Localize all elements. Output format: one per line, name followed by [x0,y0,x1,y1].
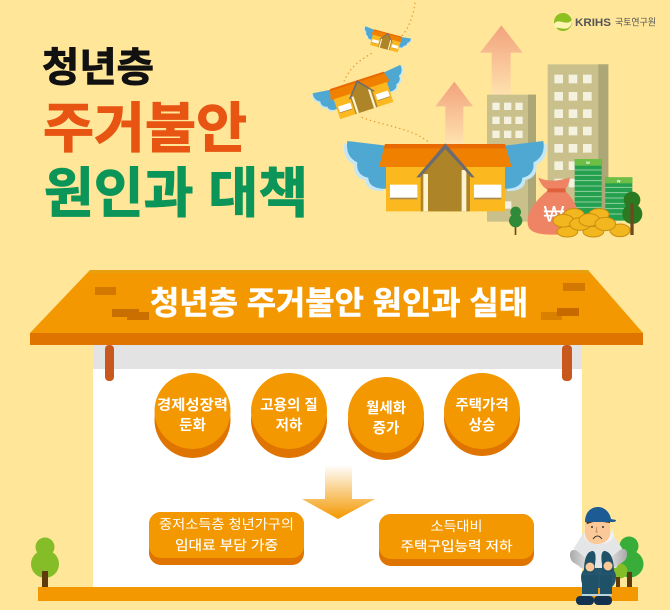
title line: green: 원인과 대책 [44,164,308,224]
roof heading: 청년층 주거불안 원인과 실태 [150,285,528,321]
money bag [528,177,579,235]
sleeve left [570,550,592,571]
house: large flying [344,141,547,211]
cause 1: 둔화 [179,417,206,434]
worried young man [570,507,627,605]
knees [584,551,596,574]
cause 4: 주택가격 [455,397,509,414]
calf left [582,575,598,595]
roof shadow band [93,345,582,369]
money bag: ₩ [544,201,565,226]
gold coins [553,209,630,237]
dotted flight path [343,3,430,143]
face [585,521,610,544]
title line: black: 청년층 [42,46,154,90]
cause 4: 상승 [469,417,495,434]
title [42,46,308,224]
logo: KRIHS [554,13,656,31]
arrow: tall rising [480,25,523,97]
cause 1: 경제성장력 [157,397,228,414]
peg left [105,345,114,381]
hands [586,562,594,572]
peg right [562,345,572,381]
tree: dark [622,192,642,235]
cause 2 [251,373,327,458]
thighs [581,568,616,588]
house panel: causes and status [30,270,643,590]
ground [38,587,638,601]
result 2 [379,514,534,566]
title line: orange: 주거불안 [43,99,247,159]
logo: KRIHS: KRIHS [575,17,611,29]
cap [585,507,616,522]
cause 3: 월세화 [366,400,406,417]
logo: KRIHS: 국토연구원 [615,18,656,28]
cause 2: 고용의 질 [260,397,318,414]
tree: right [612,536,644,587]
banknote stacks [575,159,632,221]
result 1 [149,512,304,565]
hoodie [572,532,624,568]
cause 1 [154,373,230,458]
banknote stacks: w [616,178,621,183]
house: small flying [360,26,412,55]
illustration: rising housing prices [311,3,642,237]
shoe left [576,596,594,605]
cuffs [582,594,612,596]
sleeve right [605,549,627,570]
building: short [487,95,536,222]
cause 3 [348,377,424,460]
roof [30,270,643,345]
building wall [93,345,582,590]
result 2: 소득대비 [430,519,482,534]
arrow: down [302,465,375,519]
arrow: short rising [435,82,473,145]
tree: small [509,207,522,235]
tree: left [31,538,59,587]
result 2: 주택구입능력 저하 [400,539,513,554]
cause 2: 저하 [276,417,303,434]
house: medium flying [311,64,412,125]
result 1: 중저소득층 청년가구의 [159,517,294,532]
building: tall [548,64,608,211]
calf right [600,575,612,595]
banknote stacks: w [585,160,590,165]
cause 3: 증가 [373,420,399,437]
cause 4 [444,373,520,456]
result 1: 임대료 부담 가중 [175,538,278,553]
shoe right [594,596,612,605]
